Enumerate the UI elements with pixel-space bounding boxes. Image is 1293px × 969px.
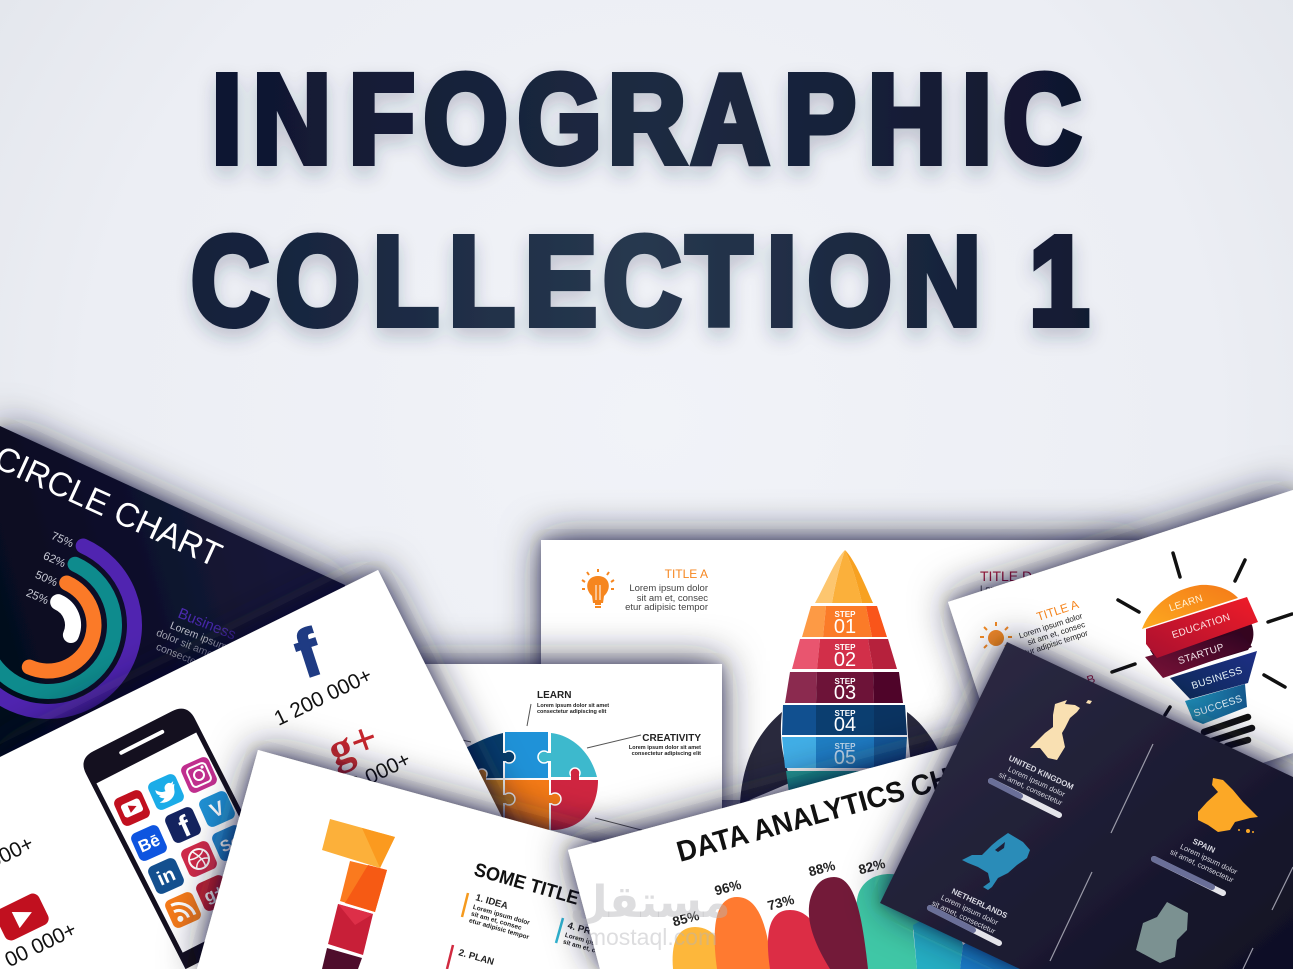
chart percentage labels: 62%: [41, 550, 67, 570]
title A text block: sit am et, consec: [1026, 620, 1086, 647]
chart bars: [673, 874, 1040, 969]
rocket step 01: STEP: [835, 610, 856, 619]
stat: google plus count: 1 000 000+: [309, 748, 414, 815]
title A text block: [1010, 597, 1089, 659]
panel: map card: [880, 642, 1293, 969]
rocket step 02: STEP: [835, 643, 856, 652]
bulb segment: business: [1170, 651, 1257, 699]
watermark: mostaql.com: [587, 924, 717, 950]
text: spain: SPAIN: [1191, 837, 1217, 855]
panel: rocket card: [541, 540, 1140, 804]
icon: google plus tile: [194, 873, 234, 913]
rocket step 01: [802, 606, 887, 638]
icon: google plus tile: g+: [201, 881, 227, 906]
chart percentage labels: [671, 856, 887, 929]
text: netherlands: [930, 881, 1009, 938]
rocket step 01: 01: [834, 616, 856, 638]
bulb segment: education: [1146, 597, 1258, 658]
divider lines: [1050, 744, 1293, 969]
business legend text: Lorem ipsum: [168, 620, 229, 654]
chart percentage labels: 73%: [766, 892, 796, 913]
puzzle labels and callouts: [462, 690, 701, 831]
icon: behance tile: Bē: [135, 830, 163, 857]
progress bar: united kingdom: [991, 781, 1059, 815]
watermark: [570, 877, 730, 950]
icon: behance tile: [129, 823, 169, 863]
list item 4: process: 4. PROCESS: [566, 920, 624, 947]
title: COLLECTION 1: [191, 211, 1089, 351]
icon: facebook f: f: [286, 614, 331, 692]
heading: data analytics chart: DATA ANALYTICS CHART: [673, 747, 1010, 869]
icon: instagram tile: [179, 755, 219, 795]
rocket step 04: STEP: [835, 709, 856, 718]
bulb segment: success: [1185, 684, 1247, 724]
panel: light bulb card: [948, 490, 1293, 829]
panel: circle chart card: [0, 426, 345, 800]
bulb segment: learn: [1142, 585, 1238, 629]
list item 1: idea: 1. IDEA: [474, 892, 509, 912]
title: [191, 49, 1089, 351]
rocket step 03: STEP: [835, 677, 856, 686]
title A text block: etur adipisic tempor: [1020, 628, 1089, 659]
bulb segment: success: SUCCESS: [1193, 694, 1244, 720]
icon: orange light bulb: [582, 569, 614, 607]
bulb segment: business: BUSINESS: [1190, 665, 1244, 692]
chart percentage labels: 75%: [49, 530, 75, 550]
icon: dribbble tile: [179, 839, 219, 879]
list item 1: idea: sit am et, consec: [470, 911, 523, 932]
text: united kingdom: [997, 753, 1075, 809]
rocket fins: [740, 712, 945, 804]
list item 2: plan: [447, 945, 495, 969]
title A text block: sit am et, consec: [637, 593, 708, 604]
map: netherlands: [962, 833, 1030, 890]
rocket step 03: 03: [834, 682, 856, 704]
rocket step 02: 02: [834, 649, 856, 671]
puzzle labels and callouts: consectetur adipiscing elit: [537, 709, 607, 715]
puzzle brain: [462, 732, 598, 835]
heading: some title: SOME TITLE: [472, 860, 581, 910]
panel: social media card: [0, 570, 578, 969]
title A text block: [625, 567, 708, 613]
phone: [78, 703, 294, 969]
business legend text: [150, 600, 238, 678]
rocket step 04: 04: [834, 714, 856, 736]
rocket step 05: 05: [834, 747, 856, 769]
rocket nose cone: [815, 550, 873, 603]
title A text block: Lorem ipsum dolor: [1018, 611, 1084, 640]
bulb segment: education: EDUCATION: [1171, 612, 1232, 641]
rocket step 06: [786, 771, 905, 800]
text: united kingdom: UNITED KINGDOM: [1007, 754, 1075, 792]
title: INFOGRAPHIC: [212, 49, 1081, 189]
title A text block: etur adipisic tempor: [625, 602, 708, 613]
text: united kingdom: Lorem ipsum dolor: [1007, 764, 1067, 799]
bulb segment: startup: [1145, 632, 1252, 678]
chart percentage labels: 50%: [33, 569, 59, 589]
rocket step 02: [792, 639, 897, 671]
text: united kingdom: sit amet, consectetur: [997, 770, 1064, 808]
text: spain: sit amet, consectetur: [1169, 847, 1236, 885]
text: netherlands: Lorem ipsum dolor: [940, 893, 1000, 927]
title D text block: [980, 568, 1059, 595]
chart percentage labels: 25%: [24, 587, 50, 607]
icon: google plus: g+: [321, 711, 385, 776]
panel: data analytics card: [568, 733, 1100, 969]
icon: facebook tile: f: [174, 809, 197, 844]
text: netherlands: sit amet, consectetur: [930, 898, 997, 936]
title D text block: Lorem ipsum dolor: [980, 584, 1059, 595]
title A text block: TITLE A: [665, 567, 708, 581]
icon: small orange bulb: [980, 622, 1012, 648]
icon: rss tile: [163, 890, 203, 930]
list item 4: process: Lorem ipsum dolor: [564, 932, 623, 955]
stat: facebook count: 1 200 000+: [271, 664, 376, 731]
map: spain: [1198, 778, 1258, 833]
bulb segment: startup: STARTUP: [1177, 642, 1226, 667]
puzzle labels and callouts: Lorem ipsum dolor sit amet: [537, 703, 609, 709]
rocket step 05: [782, 737, 907, 769]
rocket step 04: [782, 705, 907, 736]
icon: vine tile: V: [207, 797, 229, 823]
bulb dark inner: [1150, 608, 1253, 675]
icon: twitter tile: [146, 772, 186, 812]
title A text block: Lorem ipsum dolor: [629, 583, 708, 594]
bulb rays: [1112, 553, 1292, 715]
icon: skype tile: [210, 823, 250, 863]
puzzle labels and callouts: Lorem ipsum dolor sit amet: [629, 745, 701, 751]
rocket step 03: [785, 672, 903, 704]
list item 4: process: [556, 918, 626, 962]
list item 1: idea: etur adipisic tempor: [468, 917, 530, 941]
icon: vine tile: [197, 789, 237, 829]
text: spain: Lorem ipsum dolor: [1179, 842, 1239, 877]
list item 2: plan: 2. PLAN: [457, 947, 495, 968]
chart percentage labels: 96%: [713, 877, 743, 898]
chart percentage labels: [24, 530, 75, 607]
title D text block: TITLE D: [980, 568, 1032, 584]
chart percentage labels: 85%: [671, 908, 701, 929]
icon: youtube: [0, 891, 51, 943]
text: spain: [1169, 830, 1244, 885]
list item 1: idea: Lorem ipsum dolor: [472, 904, 531, 927]
icon: skype tile: So: [218, 832, 244, 856]
bulb screw base: [1204, 717, 1252, 746]
big polygon number one: [322, 819, 395, 969]
list item 1: idea: [462, 892, 537, 941]
map: united kingdom: [1030, 700, 1092, 760]
list item 4: process: sit am et, consec: [562, 939, 615, 960]
radial progress chart: [0, 511, 162, 739]
progress bar: netherlands: [930, 908, 999, 943]
progress bar: spain: [1154, 859, 1223, 893]
business legend text: consectetur: [154, 641, 210, 673]
chart percentage labels: 88%: [807, 858, 837, 879]
business legend text: Business: [176, 605, 238, 644]
bulb segment: learn: LEARN: [1168, 593, 1205, 614]
puzzle labels and callouts: CREATIVITY: [642, 733, 701, 744]
chart percentage labels: 82%: [857, 856, 887, 877]
icon: linkedin tile: in: [154, 863, 179, 891]
panel: puzzle card: [400, 664, 722, 860]
title A text block: TITLE A: [1035, 597, 1080, 624]
panel: numbered list card: [197, 750, 720, 969]
title B text: TITLE B: [1051, 672, 1097, 698]
puzzle labels and callouts: consectetur adipiscing elit: [632, 751, 701, 757]
icon: linkedin tile: [146, 856, 186, 896]
map: germany: [1136, 902, 1188, 963]
business legend text: dolor sit amet: [154, 627, 217, 662]
watermark: مستقل: [570, 877, 730, 928]
icon: facebook tile: [163, 805, 204, 848]
rocket step 05: STEP: [835, 742, 856, 751]
icon: youtube tile: [112, 788, 152, 828]
puzzle labels and callouts: LEARN: [537, 690, 571, 701]
text: netherlands: NETHERLANDS: [950, 887, 1009, 921]
